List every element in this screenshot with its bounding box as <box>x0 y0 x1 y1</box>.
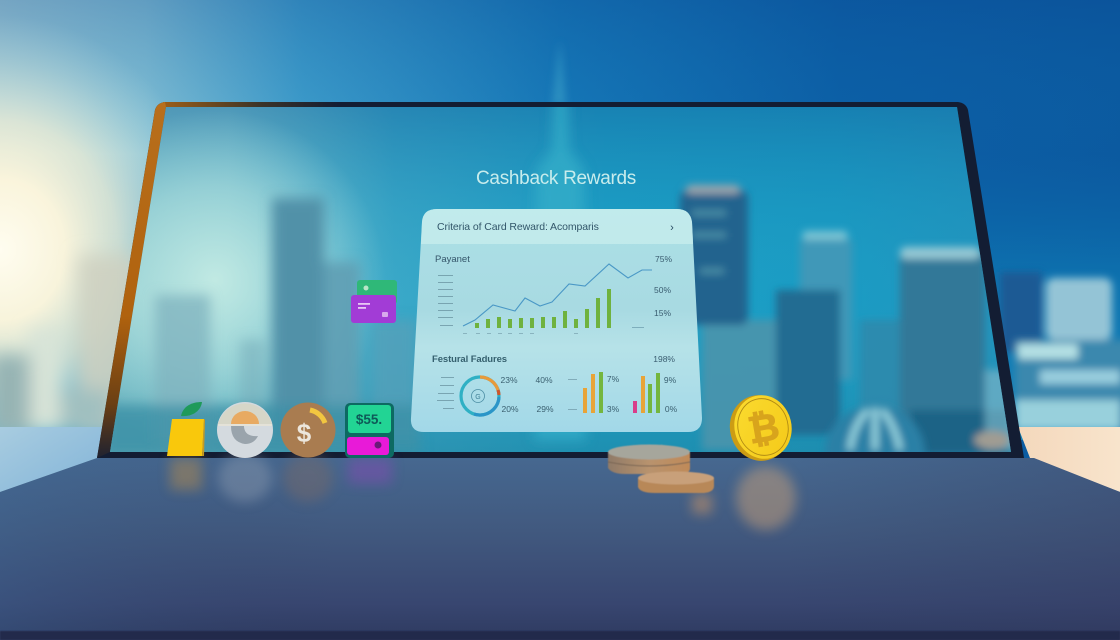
feature percentages: 7% <box>607 374 620 384</box>
bar chart: orange and green <box>583 372 603 413</box>
screen with blurred city skyline <box>110 107 1011 452</box>
icon: bitcoin coin <box>723 389 798 467</box>
reflections on table <box>170 454 796 530</box>
features total: 198% <box>653 354 675 364</box>
donut chart: G <box>475 394 481 401</box>
feature percentages: 20% <box>501 404 519 414</box>
line and bar chart <box>463 264 652 334</box>
left axis ticks <box>438 275 453 326</box>
icon: grey coin <box>217 402 273 458</box>
table surface <box>0 458 1120 640</box>
blurred dome <box>826 402 927 452</box>
feature percentages: 0% <box>665 404 678 414</box>
right axis percentages <box>654 254 672 318</box>
donut chart <box>461 377 499 415</box>
icon: green and magenta wallet: $55. <box>356 412 382 427</box>
blurred distant buildings outside the screen <box>0 40 1120 435</box>
feature percentages: 3% <box>607 404 620 414</box>
icon: green and magenta wallet <box>345 403 394 458</box>
right axis percentages: 15% <box>654 308 671 318</box>
donut legend <box>437 377 454 409</box>
icon: wallet cards <box>351 280 397 323</box>
panel: comparison dashboard <box>411 209 702 432</box>
panel header bar: Criteria of Card Reward: Acomparis <box>437 221 599 233</box>
icon: bitcoin coin: ₿ <box>745 406 783 453</box>
icon: dollar coin: $ <box>297 418 312 448</box>
feature percentages: 23% <box>500 375 518 385</box>
screen frame <box>97 102 1024 458</box>
right axis percentages: 75% <box>655 254 672 264</box>
payment heading: Payanet <box>435 254 470 265</box>
icon: yellow box with leaf <box>167 402 205 456</box>
panel header bar: › <box>670 222 674 234</box>
small bar labels <box>568 379 577 410</box>
feature percentages: 29% <box>536 404 554 414</box>
bar chart: pink orange green <box>633 373 660 413</box>
feature percentages: 40% <box>535 375 553 385</box>
feature percentages <box>500 374 678 414</box>
features heading: Festural Fadures <box>432 354 507 365</box>
panel header bar <box>421 209 693 244</box>
right axis percentages: 50% <box>654 285 671 295</box>
side ledges behind the table <box>0 427 1120 492</box>
coin stack <box>608 444 714 493</box>
icon: dollar coin <box>280 402 336 458</box>
feature percentages: 9% <box>664 375 677 385</box>
title: Cashback Rewards <box>476 168 636 189</box>
